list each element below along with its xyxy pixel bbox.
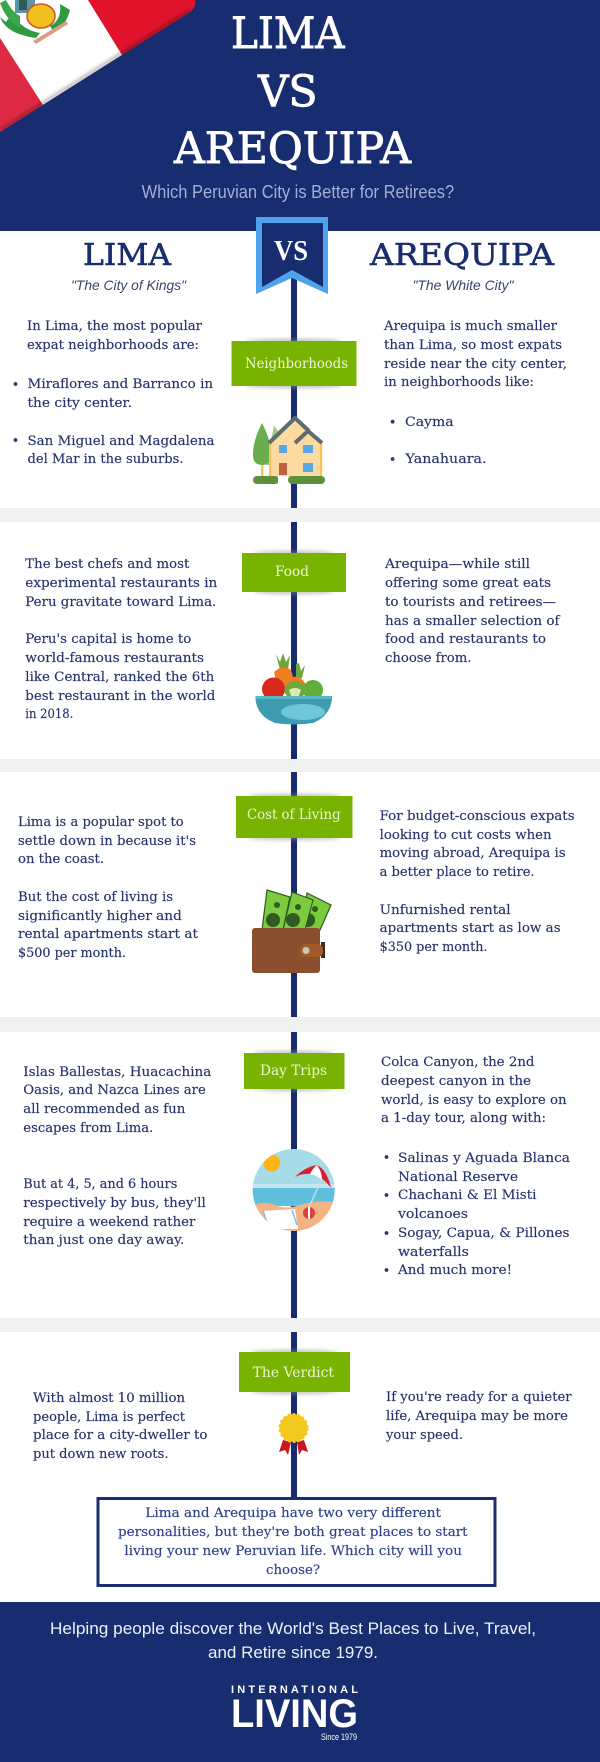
VS ribbon badge <box>256 217 328 294</box>
Arequipa neighborhoods text: Yanahuara. <box>404 452 486 467</box>
label: Day Trips: Day Trips <box>260 1063 327 1079</box>
Arequipa food text: food and restaurants to <box>385 632 546 647</box>
Arequipa verdict text: your speed. <box>385 1428 463 1443</box>
Arequipa neighborhoods text: Cayma <box>405 415 454 430</box>
Lima day trips text: But at 4, 5, and 6 hours <box>23 1177 177 1192</box>
Arequipa cost text <box>380 809 575 955</box>
section dividers <box>0 508 600 1332</box>
icon: beach scene <box>252 1149 336 1232</box>
Arequipa neighborhoods text: reside near the city center, <box>384 357 567 372</box>
Arequipa day trips text: And much more! <box>397 1263 512 1278</box>
Arequipa food text: to tourists and retirees— <box>385 595 556 610</box>
Arequipa day trips text: Salinas y Aguada Blanca <box>398 1151 570 1166</box>
label: Neighborhoods: Neighborhoods <box>245 356 348 372</box>
Arequipa day trips text: Colca Canyon, the 2nd <box>381 1055 534 1070</box>
Lima day trips text: than just one day away. <box>23 1233 184 1248</box>
Lima food text: best restaurant in the world <box>25 689 215 704</box>
closing callout box: Lima and Arequipa have two very different <box>145 1506 442 1521</box>
Lima neighborhoods text: expat neighborhoods are: <box>27 338 199 353</box>
footer tagline: and Retire since 1979. <box>208 1644 378 1662</box>
closing callout box: personalities, but they're both great places to start <box>118 1525 468 1540</box>
city headings <box>71 238 554 293</box>
panel: neighborhoods <box>14 319 567 485</box>
Lima food text: The best chefs and most <box>25 557 190 572</box>
heading: Lima: LIMA <box>83 238 171 273</box>
Arequipa cost text: $350 per month. <box>380 940 488 955</box>
icon: vegetable bowl <box>256 653 332 724</box>
label: Neighborhoods <box>232 338 356 388</box>
Lima food text <box>25 557 218 722</box>
label: Food <box>242 550 346 594</box>
Arequipa neighborhoods text: than Lima, so most expats <box>384 338 562 353</box>
Arequipa food text: choose from. <box>385 651 472 666</box>
Lima verdict text: With almost 10 million <box>33 1391 186 1406</box>
Lima neighborhoods text: the city center. <box>28 396 132 411</box>
Arequipa day trips text: deepest canyon in the <box>381 1074 531 1089</box>
Arequipa day trips text: Chachani & El Misti <box>398 1188 536 1203</box>
Lima verdict text: people, Lima is perfect <box>33 1410 186 1425</box>
label: Food: Food <box>275 564 309 580</box>
label: Cost of Living: Cost of Living <box>247 807 341 823</box>
label: Day Trips <box>244 1050 344 1092</box>
Arequipa verdict text: life, Arequipa may be more <box>386 1409 568 1424</box>
subtitle: Which Peruvian City is Better for Retirees? <box>142 182 454 202</box>
closing callout box: choose? <box>266 1563 320 1578</box>
Lima cost text: Lima is a popular spot to <box>18 815 184 830</box>
label: The Verdict: The Verdict <box>253 1365 334 1381</box>
Arequipa verdict text <box>385 1390 572 1443</box>
Lima food text: like Central, ranked the 6th <box>25 670 215 685</box>
International Living logo: INTERNATIONAL <box>231 1684 358 1696</box>
Lima cost text: significantly higher and <box>18 909 182 924</box>
Lima food text: experimental restaurants in <box>25 576 218 591</box>
Arequipa cost text: Unfurnished rental <box>380 903 511 918</box>
Arequipa cost text: For budget-conscious expats <box>380 809 575 824</box>
Lima food text: in 2018. <box>25 707 73 722</box>
icon: medal <box>279 1414 308 1455</box>
Arequipa verdict text: If you're ready for a quieter <box>386 1390 572 1405</box>
Arequipa neighborhoods text: Arequipa is much smaller <box>383 319 558 334</box>
Lima cost text: But the cost of living is <box>18 890 173 905</box>
title: AREQUIPA <box>173 124 412 174</box>
tagline: Lima: "The City of Kings" <box>71 277 187 293</box>
Arequipa food text: offering some great eats <box>385 576 551 591</box>
panel: the verdict <box>33 1350 572 1462</box>
Arequipa food text <box>384 557 561 666</box>
Lima verdict text: place for a city-dweller to <box>33 1428 208 1443</box>
Arequipa day trips text: National Reserve <box>398 1170 518 1185</box>
Lima cost text: $500 per month. <box>18 946 126 961</box>
heading: Arequipa: AREQUIPA <box>369 238 554 273</box>
title: LIMA <box>231 9 345 59</box>
Lima neighborhoods text <box>14 319 215 467</box>
Lima cost text <box>18 815 199 961</box>
Lima cost text: on the coast. <box>18 852 104 867</box>
Lima day trips text: escapes from Lima. <box>23 1121 153 1136</box>
panel: food <box>25 550 561 724</box>
Arequipa day trips text: Sogay, Capua, & Pillones <box>398 1226 570 1241</box>
Arequipa cost text: a better place to retire. <box>380 865 535 880</box>
Arequipa cost text: moving abroad, Arequipa is <box>380 846 566 861</box>
Lima day trips text <box>23 1065 212 1248</box>
icon: Peru flag <box>0 0 200 140</box>
International Living logo: LIVING <box>231 1692 358 1736</box>
icon: wallet with cash <box>252 890 331 973</box>
Lima neighborhoods text: del Mar in the suburbs. <box>28 452 184 467</box>
tagline: Arequipa: "The White City" <box>412 277 515 293</box>
Lima day trips text: require a weekend rather <box>23 1215 196 1230</box>
Arequipa cost text: looking to cut costs when <box>380 828 552 843</box>
Lima day trips text: respectively by bus, they'll <box>23 1196 206 1211</box>
closing callout box: living your new Peruvian life. Which city will you <box>124 1544 462 1559</box>
panel: cost of living <box>18 794 575 973</box>
Lima cost text: rental apartments start at <box>18 927 199 942</box>
Lima neighborhoods text: In Lima, the most popular <box>27 319 203 334</box>
title <box>173 9 412 174</box>
Arequipa cost text: apartments start as low as <box>380 921 561 936</box>
Lima verdict text: put down new roots. <box>33 1447 168 1462</box>
Lima food text: Peru's capital is home to <box>25 632 191 647</box>
Arequipa neighborhoods text <box>383 319 567 467</box>
Arequipa day trips text: waterfalls <box>398 1245 469 1260</box>
Arequipa day trips text: volcanoes <box>397 1207 468 1222</box>
footer tagline: Helping people discover the World's Best Places to Live, Travel, <box>50 1620 536 1638</box>
label: Cost of Living <box>236 794 352 840</box>
Lima day trips text: Islas Ballestas, Huacachina <box>23 1065 212 1080</box>
Lima day trips text: Oasis, and Nazca Lines are <box>23 1083 206 1098</box>
Lima food text: world-famous restaurants <box>25 651 204 666</box>
closing callout box <box>98 1498 495 1586</box>
VS ribbon badge: VS <box>274 235 308 267</box>
Lima day trips text: all recommended as fun <box>23 1102 186 1117</box>
title: VS <box>257 67 318 117</box>
Lima verdict text <box>33 1391 208 1462</box>
Lima food text: Peru gravitate toward Lima. <box>25 595 216 610</box>
International Living logo: Since 1979 <box>321 1732 357 1742</box>
Arequipa day trips text: world, is easy to explore on <box>381 1093 567 1108</box>
Lima neighborhoods text: San Miguel and Magdalena <box>28 434 215 449</box>
Lima cost text: settle down in because it's <box>18 834 196 849</box>
footer tagline <box>50 1620 536 1662</box>
Arequipa neighborhoods text: in neighborhoods like: <box>384 375 534 390</box>
icon: house <box>253 418 325 485</box>
footer band <box>0 1602 600 1762</box>
panel: day trips <box>23 1050 570 1278</box>
Arequipa day trips text <box>381 1055 570 1278</box>
Arequipa food text: Arequipa—while still <box>384 557 530 572</box>
Arequipa day trips text: a 1-day tour, along with: <box>381 1111 546 1126</box>
Lima neighborhoods text: Miraflores and Barranco in <box>28 377 214 392</box>
header band <box>0 0 600 231</box>
Arequipa food text: has a smaller selection of <box>385 614 561 629</box>
label: The Verdict <box>239 1350 350 1394</box>
central timeline <box>291 270 297 1497</box>
